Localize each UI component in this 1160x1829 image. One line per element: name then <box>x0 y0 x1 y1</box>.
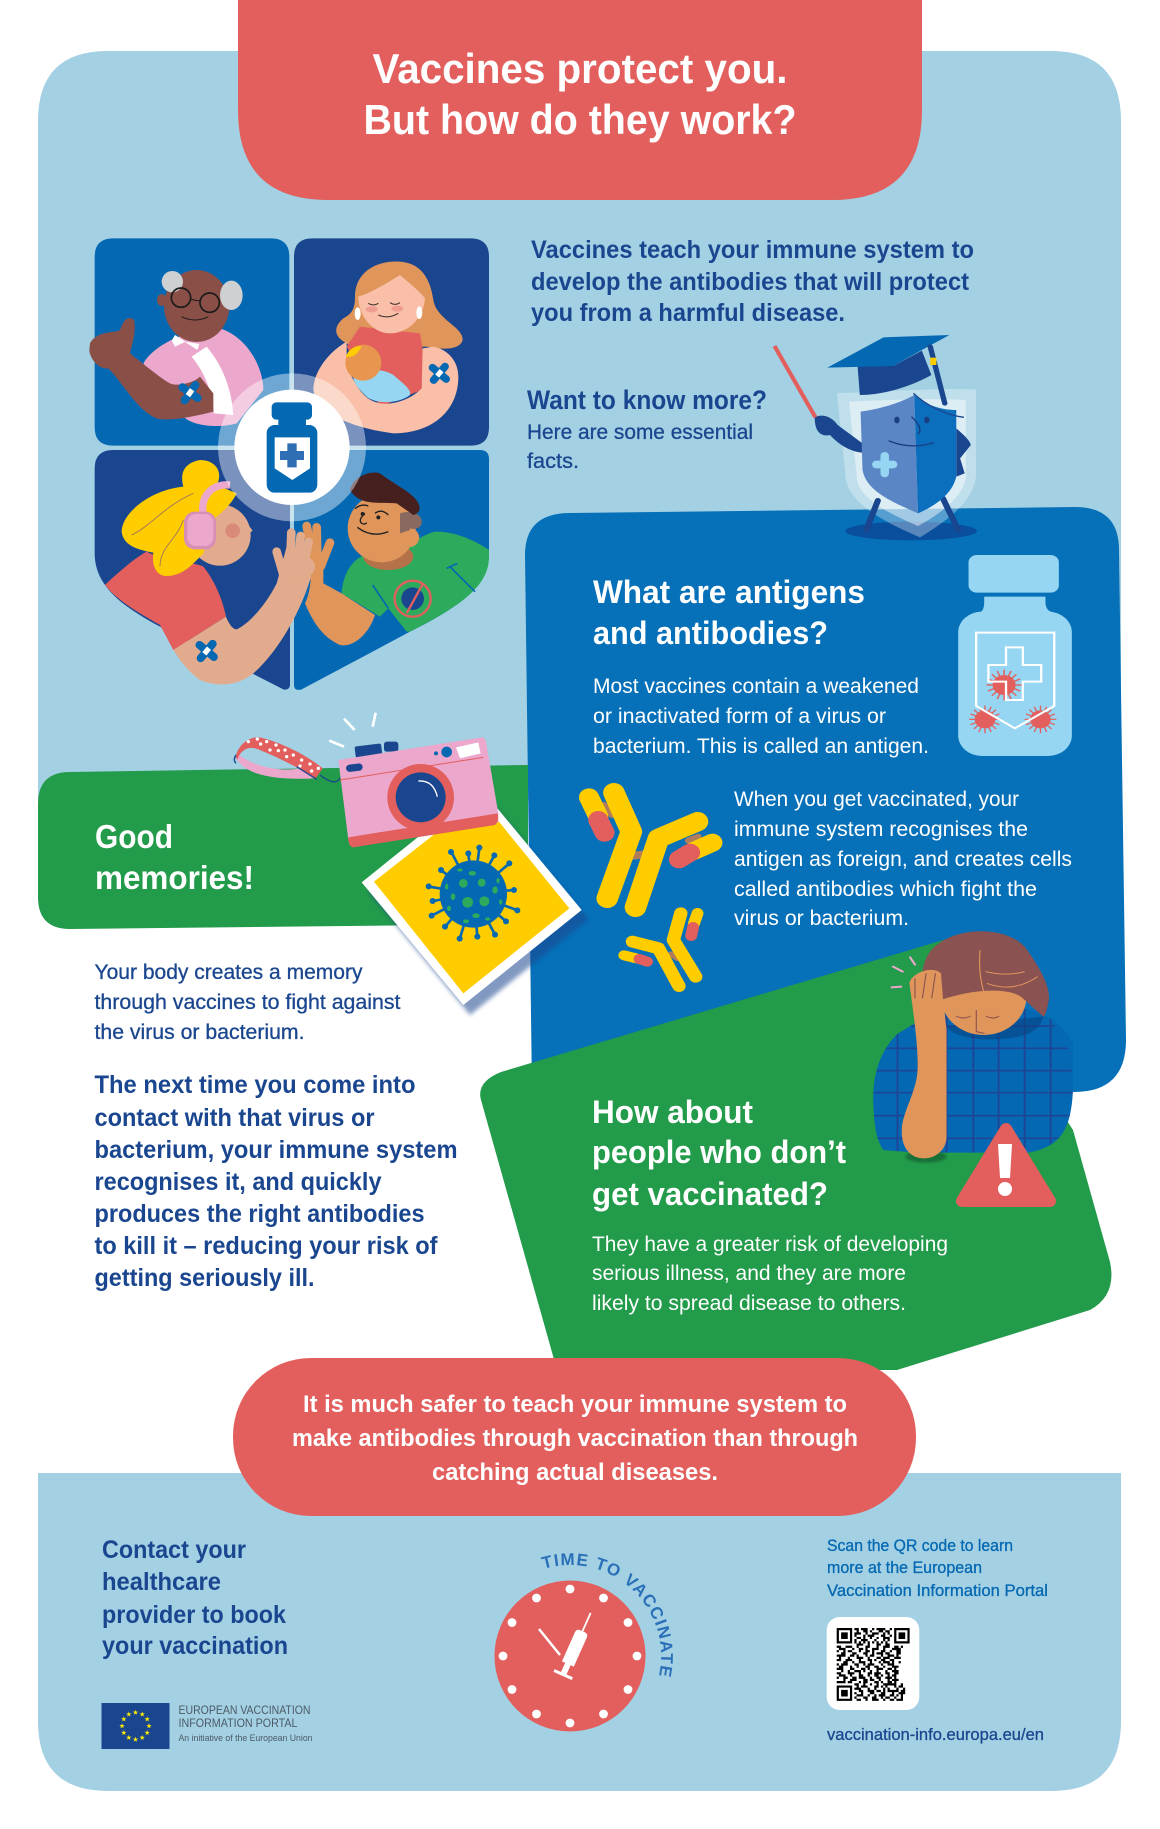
text: portal name: EUROPEAN VACCINATION <box>178 1705 310 1717</box>
text: contact your healthcare provider: healthcare <box>102 1568 221 1596</box>
text: when you get vaccinated: immune system recognises the <box>734 818 1028 841</box>
text: portal name <box>178 1705 312 1744</box>
icon: warning triangle <box>962 1129 1050 1201</box>
heading: what are antigens: and antibodies? <box>593 615 828 651</box>
person: woman with headphones <box>105 460 315 684</box>
heading: how about people who don't get vaccinated <box>592 1094 846 1212</box>
text: portal URL: vaccination-info.europa.eu/en <box>827 1725 1044 1744</box>
person: man with virus badge <box>305 472 489 645</box>
QR code <box>827 1617 919 1710</box>
text: next time explanation: to kill it – reducing your risk of <box>94 1232 438 1260</box>
text: contact your healthcare provider: your vaccination <box>102 1632 288 1660</box>
person: elderly man with thumbs up <box>89 270 263 426</box>
halo <box>218 373 366 521</box>
text: next time explanation: contact with that virus or <box>94 1104 375 1132</box>
text: want to know more <box>527 385 767 473</box>
callout: safer to teach your immune system <box>233 1358 916 1516</box>
text: scan the QR code: more at the European <box>827 1558 982 1577</box>
callout: safer to teach your immune system: It is much safer to teach your immune system to <box>303 1391 847 1418</box>
text: antigen explanation <box>593 675 929 758</box>
title banner: But how do they work? <box>364 96 796 143</box>
callout: safer to teach your immune system: catching actual diseases. <box>432 1459 718 1486</box>
heading: how about people who don't get vaccinated: How about <box>592 1094 753 1130</box>
icon: pink camera with strap <box>234 713 498 847</box>
text: when you get vaccinated: antigen as foreign, and creates cells <box>734 848 1072 871</box>
text: your body creates a memory: the virus or bacterium. <box>94 1021 304 1044</box>
text: when you get vaccinated <box>734 788 1072 930</box>
panel: good memories banner <box>38 765 528 929</box>
text: antigen explanation: bacterium. This is called an antigen. <box>593 735 929 758</box>
text: your body creates a memory: Your body creates a memory <box>94 961 363 984</box>
callout: safer to teach your immune system: make antibodies through vaccination than through <box>292 1425 858 1452</box>
text: want to know more: Here are some essential <box>527 420 753 444</box>
icon: antibodies <box>589 793 712 986</box>
heading: what are antigens: What are antigens <box>593 574 865 610</box>
text: scan the QR code: Vaccination Information Portal <box>827 1581 1048 1600</box>
logo: EU flag <box>102 1703 170 1749</box>
illustration: shield character with graduation cap <box>774 335 977 540</box>
text: portal name: An initiative of the European Union <box>178 1733 312 1744</box>
text: greater risk <box>592 1233 948 1315</box>
text: next time explanation: getting seriously ill. <box>94 1264 314 1292</box>
title banner <box>238 0 922 200</box>
text: next time explanation <box>94 1071 458 1292</box>
shield quadrant backgrounds <box>95 238 489 690</box>
text: your body creates a memory: through vaccines to fight against <box>94 991 401 1014</box>
photo of a virus <box>362 787 588 1015</box>
icon: light blue vaccine vial with viruses <box>958 555 1072 756</box>
heading: what are antigens <box>593 574 865 651</box>
panel: good memories banner: Good <box>95 818 173 855</box>
text: when you get vaccinated: virus or bacterium. <box>734 907 909 930</box>
text: next time explanation: bacterium, your immune system <box>94 1136 458 1164</box>
text: time to vaccinate curved: TIME TO VACCINATE <box>540 1553 673 1677</box>
heading: intro text <box>531 236 974 327</box>
text: greater risk: serious illness, and they are more <box>592 1262 906 1285</box>
title banner: Vaccines protect you. <box>372 45 788 92</box>
panel: people who do not get vaccinated <box>480 938 1111 1370</box>
heading: intro text: develop the antibodies that will protect <box>531 268 970 296</box>
text: when you get vaccinated: called antibodies which fight the <box>734 878 1037 901</box>
heading: intro text: Vaccines teach your immune system to <box>531 236 974 264</box>
woman's raised hand <box>277 533 309 577</box>
text: contact your healthcare provider: provider to book <box>102 1601 286 1629</box>
text: contact your healthcare provider: Contact your <box>102 1536 246 1564</box>
text: next time explanation: The next time you come into <box>94 1071 416 1099</box>
heading: how about people who don't get vaccinated: get vaccinated? <box>592 1176 828 1212</box>
text: scan the QR code <box>827 1536 1048 1600</box>
text: antigen explanation: Most vaccines contain a weakened <box>593 675 919 698</box>
person: mother holding baby <box>313 261 463 433</box>
icon: clock with syringe <box>494 1580 646 1732</box>
text: portal name: INFORMATION PORTAL <box>178 1718 298 1730</box>
text: next time explanation: produces the right antibodies <box>94 1200 424 1228</box>
panel: lower light blue background <box>38 1473 1121 1791</box>
heading: how about people who don't get vaccinated: people who don’t <box>592 1134 846 1170</box>
heading: intro text: you from a harmful disease. <box>531 299 845 327</box>
text: antigen explanation: or inactivated form of a virus or <box>593 705 886 728</box>
panel: good memories banner: memories! <box>95 859 254 896</box>
text: greater risk: They have a greater risk of developing <box>592 1233 948 1256</box>
panel: antigens and antibodies <box>525 507 1126 1092</box>
text: when you get vaccinated: When you get vaccinated, your <box>734 788 1019 811</box>
text: want to know more: facts. <box>527 449 579 473</box>
text: next time explanation: recognises it, and quickly <box>94 1168 382 1196</box>
illustration: four people in a shield <box>89 238 489 690</box>
text: want to know more: Want to know more? <box>527 385 767 415</box>
text: contact your healthcare provider <box>102 1536 288 1660</box>
illustration: unwell woman <box>869 931 1077 1163</box>
centre badge with vial <box>234 390 350 505</box>
panel: upper light blue background <box>38 51 1121 800</box>
text: greater risk: likely to spread disease to others. <box>592 1292 906 1315</box>
text: your body creates a memory <box>94 961 401 1044</box>
text: scan the QR code: Scan the QR code to learn <box>827 1536 1013 1555</box>
